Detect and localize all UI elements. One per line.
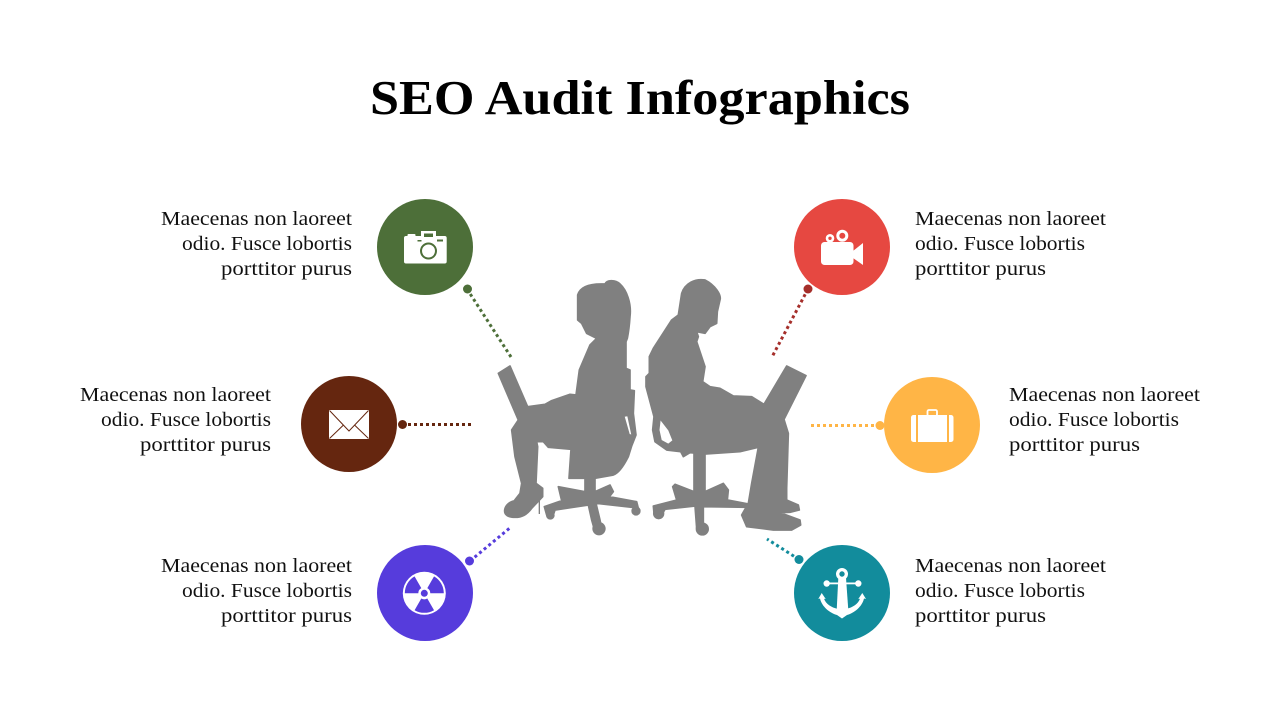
silhouette: man on chair with laptop bbox=[646, 280, 806, 536]
text: envelope item bbox=[80, 384, 271, 456]
text: camera item: Maecenas non laoreet bbox=[161, 208, 352, 230]
text: briefcase item bbox=[1009, 384, 1200, 456]
text: radiation item: Maecenas non laoreet bbox=[161, 555, 352, 577]
text: anchor item: Maecenas non laoreet bbox=[915, 555, 1106, 577]
circle: teal bbox=[794, 545, 890, 641]
icon: video camera bbox=[821, 231, 863, 265]
circle: brown bbox=[301, 376, 397, 472]
text: camera item: porttitor purus bbox=[221, 258, 352, 280]
connector: brown dotted line bbox=[398, 420, 471, 429]
silhouette: woman on chair with laptop bbox=[498, 281, 641, 535]
panel: video camera item bbox=[772, 199, 1106, 357]
text: radiation item: odio. Fusce lobortis bbox=[182, 580, 352, 602]
panel: radiation item bbox=[161, 527, 511, 641]
panel: envelope item bbox=[80, 376, 471, 472]
title: SEO Audit Infographics bbox=[370, 70, 910, 125]
text: camera item bbox=[161, 208, 352, 280]
text: anchor item: porttitor purus bbox=[915, 605, 1046, 627]
text: briefcase item: Maecenas non laoreet bbox=[1009, 384, 1200, 406]
icon: briefcase bbox=[911, 410, 954, 442]
text: anchor item bbox=[915, 555, 1106, 627]
circle: orange bbox=[884, 377, 980, 473]
icon: envelope bbox=[329, 410, 369, 439]
text: briefcase item: porttitor purus bbox=[1009, 434, 1140, 456]
text: video camera item: Maecenas non laoreet bbox=[915, 208, 1106, 230]
connector: orange dotted line bbox=[811, 421, 884, 430]
connector: teal dotted line bbox=[767, 539, 804, 564]
icon: anchor bbox=[818, 570, 866, 618]
text: camera item: odio. Fusce lobortis bbox=[182, 233, 352, 255]
text: radiation item bbox=[161, 555, 352, 627]
connector: red dotted line bbox=[772, 284, 812, 357]
circle: green bbox=[377, 199, 473, 295]
text: envelope item: Maecenas non laoreet bbox=[80, 384, 271, 406]
circle: red bbox=[794, 199, 890, 295]
circle: purple bbox=[377, 545, 473, 641]
text: briefcase item: odio. Fusce lobortis bbox=[1009, 409, 1179, 431]
text: envelope item: porttitor purus bbox=[140, 434, 271, 456]
connector: purple dotted line bbox=[465, 527, 511, 566]
panel: anchor item bbox=[767, 539, 1106, 641]
text: anchor item: odio. Fusce lobortis bbox=[915, 580, 1085, 602]
icon: radiation bbox=[403, 572, 446, 615]
text: video camera item: porttitor purus bbox=[915, 258, 1046, 280]
text: envelope item: odio. Fusce lobortis bbox=[101, 409, 271, 431]
text: radiation item: porttitor purus bbox=[221, 605, 352, 627]
text: video camera item: odio. Fusce lobortis bbox=[915, 233, 1085, 255]
panel: camera item bbox=[161, 199, 511, 357]
icon: camera bbox=[404, 231, 447, 264]
text: video camera item bbox=[915, 208, 1106, 280]
panel: briefcase item bbox=[811, 377, 1200, 473]
connector: green dotted line bbox=[463, 284, 511, 357]
